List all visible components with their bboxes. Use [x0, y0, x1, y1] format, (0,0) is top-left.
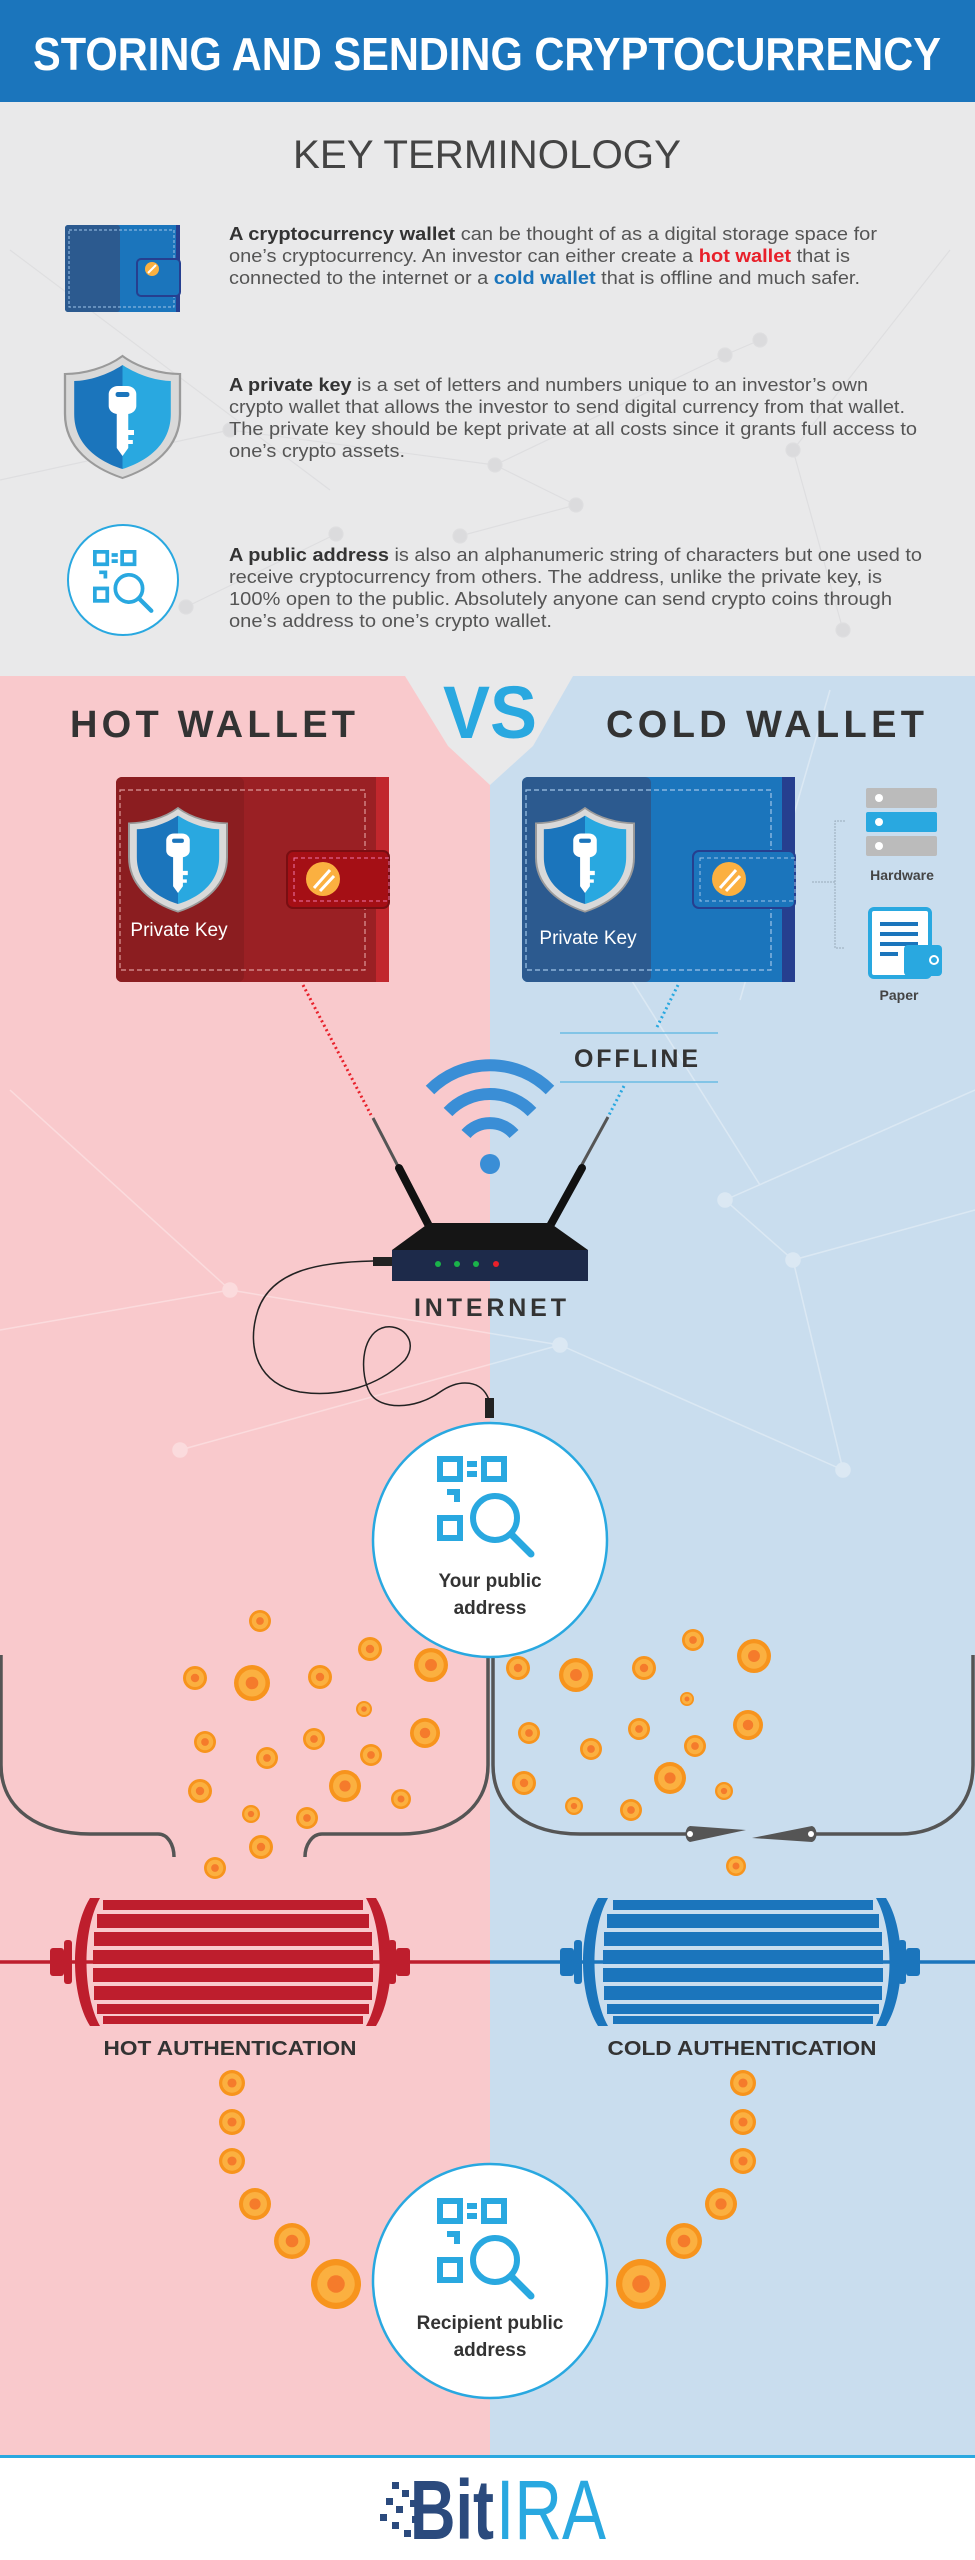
- text: private key: one’s crypto assets.: [229, 441, 405, 461]
- label: hardware: Hardware: [870, 867, 934, 883]
- router: [373, 1117, 608, 1281]
- dotted link: hot wallet to router: [303, 985, 371, 1115]
- text: cryptocurrency wallet: connected to the internet or a cold wallet that is offline and much safer.: [229, 268, 860, 288]
- recipient public address circle: [373, 2164, 607, 2398]
- your public address circle: address: [454, 1598, 526, 1619]
- logo: BitIRA: [380, 2463, 606, 2557]
- your public address circle: Your public: [438, 1571, 542, 1592]
- label: internet: INTERNET: [414, 1294, 566, 1322]
- text: private key: The private key should be kept private at all costs since it grants full access to: [229, 419, 917, 439]
- bracket connector: [812, 821, 845, 948]
- text: cryptocurrency wallet: [229, 224, 877, 288]
- coins: cold output arc: [616, 2070, 756, 2309]
- footer: [0, 2455, 975, 2560]
- panel: key terminology background: [0, 102, 975, 676]
- coins: hot side: [183, 1610, 448, 1879]
- vs notch: [405, 676, 573, 785]
- icon: hardware: [866, 788, 937, 856]
- hot authentication cylinder: [50, 1898, 410, 2026]
- icon: shield with key: [65, 356, 180, 478]
- wire: [0, 1960, 975, 1964]
- heading: hot wallet: HOT WALLET: [70, 704, 355, 746]
- coins: cold side: [506, 1629, 771, 1876]
- label: private key cold: Private Key: [539, 928, 637, 949]
- text: public address: 100% open to the public. Absolutely anyone can send crypto coins through: [229, 589, 892, 609]
- cold wallet illustration: [522, 777, 795, 982]
- icon: paper wallet: [870, 909, 942, 977]
- heading: cold wallet: COLD WALLET: [606, 704, 924, 746]
- icon: wallet: [65, 225, 180, 312]
- text: cryptocurrency wallet: one’s cryptocurrency. An investor can either create a hot wallet that is: [229, 246, 850, 266]
- header bar: [0, 0, 975, 102]
- text: public address: receive cryptocurrency from others. The address, unlike the private key, is: [229, 567, 882, 587]
- coins: hot output arc: [219, 2070, 361, 2309]
- cable: [253, 1261, 489, 1406]
- funnels: [1, 1655, 973, 1857]
- label: offline: OFFLINE: [574, 1045, 698, 1073]
- hot wallet illustration: [116, 777, 389, 982]
- valve: [686, 1826, 816, 1842]
- text: private key: A private key is a set of letters and numbers unique to an investor’s own: [229, 375, 868, 395]
- label: hot authentication: HOT AUTHENTICATION: [104, 2038, 356, 2060]
- icon: wifi: [430, 1065, 550, 1174]
- dotted link: cold wallet broken: [608, 985, 678, 1117]
- icon: public address: [68, 525, 178, 635]
- cold authentication cylinder: [560, 1898, 920, 2026]
- logo: BitIRA: IRA: [496, 2463, 606, 2557]
- text: cryptocurrency wallet: A cryptocurrency wallet can be thought of as a digital storage space for: [229, 224, 877, 244]
- your public address circle: [373, 1423, 607, 1657]
- logo: BitIRA: Bit: [410, 2463, 494, 2557]
- label: cold authentication: COLD AUTHENTICATION: [608, 2038, 876, 2060]
- heading: key terminology: KEY TERMINOLOGY: [293, 133, 681, 177]
- panel: cold wallet side: [490, 676, 975, 2456]
- label: paper: Paper: [880, 987, 919, 1003]
- heading: VS: VS: [443, 671, 537, 754]
- text: public address: one’s address to one’s crypto wallet.: [229, 611, 552, 631]
- label: private key hot: Private Key: [130, 920, 228, 941]
- text: private key: [229, 375, 917, 461]
- recipient public address circle: address: [454, 2340, 526, 2361]
- text: public address: A public address is also an alphanumeric string of characters but one used to: [229, 545, 922, 565]
- text: private key: crypto wallet that allows the investor to send digital currency from that wallet.: [229, 397, 905, 417]
- text: public address: [229, 545, 922, 631]
- recipient public address circle: Recipient public: [417, 2313, 564, 2334]
- panel: hot wallet side: [0, 676, 490, 2456]
